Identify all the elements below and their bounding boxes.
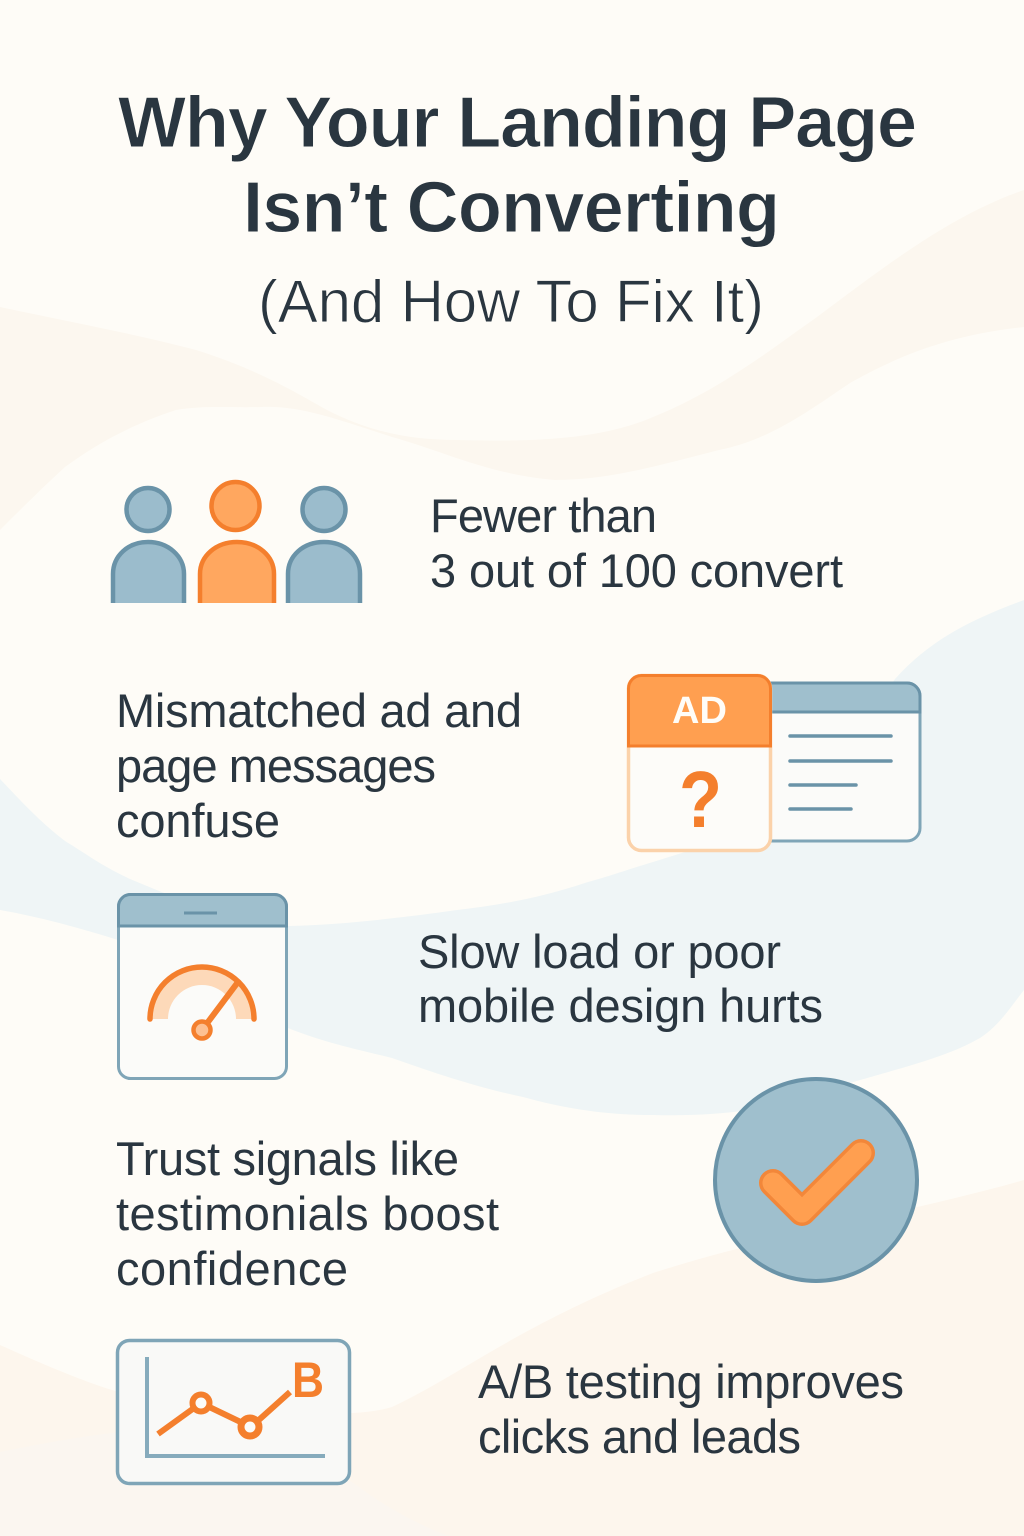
title: Why Your Landing Page [118, 83, 917, 163]
ad card: AD [672, 690, 727, 732]
text: mismatched messages: confuse [116, 794, 280, 847]
text: slow load: Slow load or poor [418, 925, 781, 978]
text: A/B testing [478, 1355, 904, 1463]
text: trust signals: confidence [116, 1242, 348, 1295]
text: conversion rate: 3 out of 100 convert [430, 544, 843, 597]
icon: three people, one highlighted [113, 482, 360, 603]
text: slow load [418, 925, 823, 1032]
web page window [700, 683, 920, 841]
text: trust signals: testimonials boost [116, 1187, 499, 1240]
title: Isn’t Converting [243, 168, 780, 248]
text: slow load: mobile design hurts [418, 979, 823, 1032]
text: mismatched messages: Mismatched ad and [116, 684, 522, 737]
text: A/B testing: A/B testing improves [478, 1355, 904, 1408]
icon: mobile window with speed gauge [118, 894, 286, 1078]
icon: ad card over web page [628, 676, 920, 850]
gauge [150, 967, 254, 1038]
text: A/B testing: clicks and leads [478, 1410, 801, 1463]
icon: A/B test chart [118, 1340, 350, 1484]
text: trust signals: Trust signals like [116, 1132, 459, 1185]
title [118, 83, 917, 248]
ad card [628, 676, 770, 850]
subtitle: (And How To Fix It) [258, 268, 764, 335]
icon: A/B test chart: B [292, 1352, 324, 1408]
text: mismatched messages: page messages [116, 739, 436, 792]
icon: checkmark badge [715, 1079, 917, 1281]
text: conversion rate: Fewer than [430, 489, 657, 542]
text: mismatched messages [116, 684, 522, 847]
text: conversion rate [430, 489, 843, 597]
text: trust signals [116, 1132, 499, 1295]
ad card: ? [679, 755, 722, 844]
